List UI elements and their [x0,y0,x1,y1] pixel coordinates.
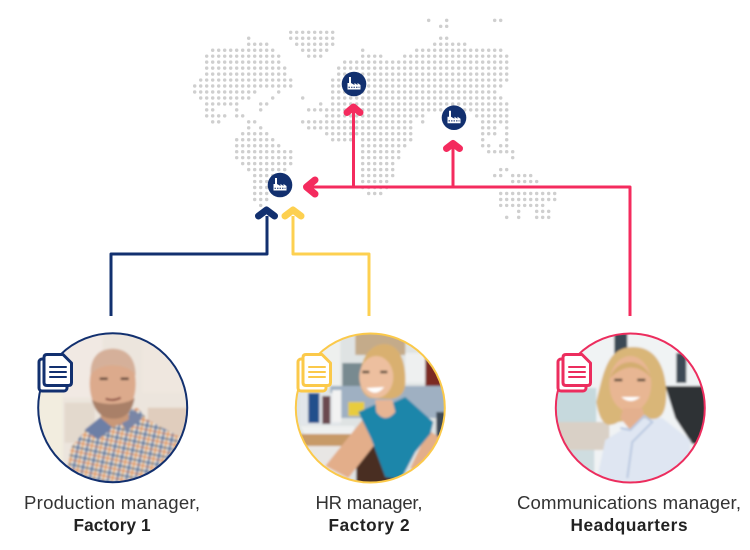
caption: production manager [24,492,200,535]
icon: factory pin europe [342,72,366,96]
portrait: HR manager [294,332,446,484]
caption: communications manager [517,492,741,535]
connector: factory 1 (navy) [111,210,274,316]
caption: production manager: Production manager, [24,492,200,513]
caption: communications manager: Communications manager, [517,492,741,513]
caption: HR manager [316,492,422,535]
connector: headquarters (pink) [306,107,630,316]
caption: HR manager: HR manager, [316,492,422,513]
portrait: communications manager [554,332,706,484]
connector: factory 2 (yellow) [285,210,369,316]
caption: communications manager: Headquarters [570,515,688,535]
icon: factory pin asia [442,105,466,130]
icon: factory pin south america [268,173,292,197]
portrait: production manager [37,332,188,484]
icon: document pink [558,354,590,391]
caption: production manager: Factory 1 [74,515,151,535]
dotted world map [195,20,555,217]
icon: document yellow [298,354,330,391]
caption: HR manager: Factory 2 [328,515,410,535]
icon: document navy [39,354,72,391]
